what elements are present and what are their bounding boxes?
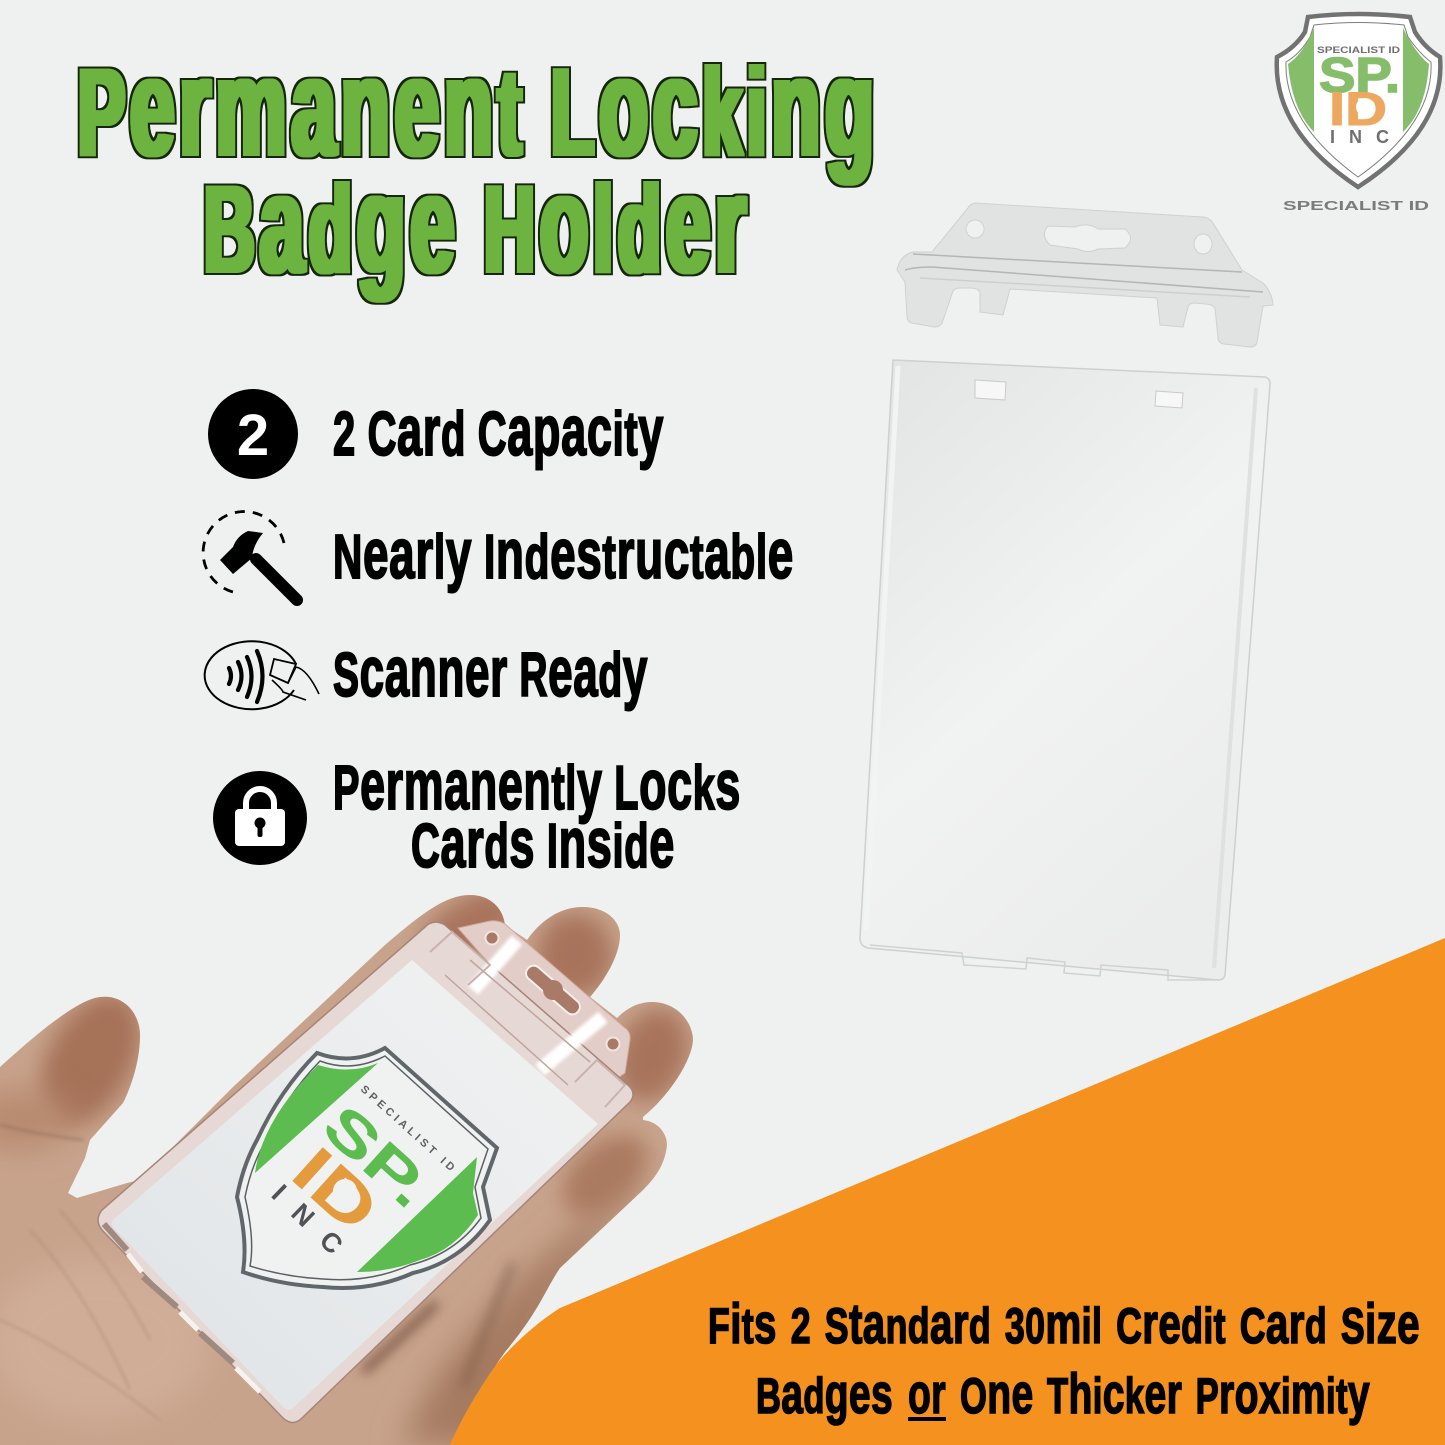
badge holder: clear sleeve (860, 360, 1270, 980)
title: Badge Holder (204, 145, 751, 302)
icon: padlock (213, 771, 307, 865)
badge holder: locking clip (897, 203, 1273, 347)
label: permanently locks cards inside: Cards Inside (411, 804, 675, 882)
hand (0, 895, 693, 1445)
label: scanner ready: Scanner Ready (333, 633, 648, 711)
frame highlights and latch details (104, 932, 625, 1392)
label: 2 card capacity: 2 Card Capacity (333, 392, 664, 470)
feature: scanner ready (205, 633, 648, 711)
caption: card fit note (708, 1292, 1420, 1425)
card insert (112, 960, 598, 1410)
logo: Specialist ID shield: INC (1330, 127, 1389, 147)
logo: Specialist ID shield: ID (1329, 82, 1387, 135)
card logo shield: INC (266, 1179, 349, 1260)
photo: hand holding badge (0, 875, 700, 1445)
title (78, 28, 879, 302)
logo: Specialist ID shield: SPECIALIST ID (1283, 198, 1429, 213)
card logo shield: ID (279, 1132, 394, 1246)
feature: nearly indestructable (203, 512, 794, 600)
label: permanently locks cards inside: Permanently Locks (333, 746, 741, 824)
icon: number 2 (208, 389, 298, 479)
caption: card fit note: Badges (756, 1362, 893, 1425)
logo: Specialist ID shield: SP. (1319, 49, 1400, 103)
label: permanently locks cards inside (333, 746, 741, 882)
feature: 2 card capacity (208, 389, 664, 479)
icon: contactless scan (205, 641, 319, 709)
tab slot and holes (486, 932, 620, 1050)
icon: hammer (203, 512, 297, 600)
card logo shield (237, 1048, 497, 1288)
orange corner panel (447, 938, 1445, 1445)
logo: Specialist ID shield (1277, 14, 1440, 213)
caption: card fit note: One Thicker Proximity (960, 1362, 1370, 1425)
card logo shield: SP. (310, 1092, 443, 1221)
card logo shield: SPECIALIST ID (358, 1083, 457, 1174)
caption: card fit note: or (908, 1362, 946, 1425)
icon: number 2: 2 (237, 403, 269, 468)
feature: permanently locks cards inside (213, 746, 741, 882)
holder tab (458, 921, 630, 1090)
logo: Specialist ID shield: SPECIALIST ID (1317, 45, 1401, 55)
title: Permanent Locking (78, 28, 879, 185)
hand shading (0, 875, 700, 1445)
caption: card fit note: Fits 2 Standard 30mil Credit Card Size (708, 1292, 1420, 1355)
label: nearly indestructable: Nearly Indestructable (333, 515, 794, 593)
holder frame (98, 922, 633, 1422)
